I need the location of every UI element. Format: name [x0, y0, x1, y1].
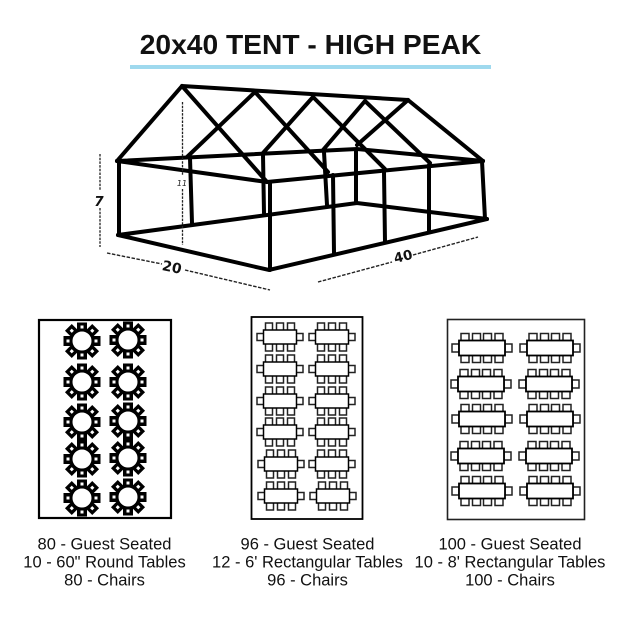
dimension: length 40: [318, 237, 478, 282]
panel: round table layout: [39, 320, 171, 518]
title underline: [130, 65, 491, 69]
caption: round table layout: 10 - 60" Round Tables: [23, 554, 186, 572]
dimension: width 20: 20: [161, 258, 183, 278]
caption: round table layout: 80 - Guest Seated: [38, 536, 171, 554]
caption: 6 ft table layout: 96 - Guest Seated: [241, 536, 374, 554]
caption: 6 ft table layout: 96 - Chairs: [267, 572, 348, 590]
dimension: height 7: [94, 154, 104, 247]
dimension: height 7: 7: [94, 194, 104, 210]
dimension: length 40: 40: [392, 247, 414, 267]
title: 20x40 TENT - HIGH PEAK: [140, 28, 482, 60]
caption: round table layout: 80 - Chairs: [64, 572, 145, 590]
panel: 6 ft rectangular table layout: [252, 317, 362, 519]
dimension: height 11: 11: [177, 179, 187, 188]
panel: 8 ft rectangular table layout: [448, 320, 584, 520]
caption: 8 ft table layout: 100 - Chairs: [465, 572, 555, 590]
dimension: width 20: [107, 253, 270, 290]
caption: 8 ft table layout: 100 - Guest Seated: [438, 536, 582, 554]
caption: 8 ft table layout: 10 - 8' Rectangular Tables: [415, 554, 605, 572]
caption: 6 ft table layout: 12 - 6' Rectangular Tables: [212, 554, 403, 572]
tent frame diagram: [117, 86, 487, 270]
